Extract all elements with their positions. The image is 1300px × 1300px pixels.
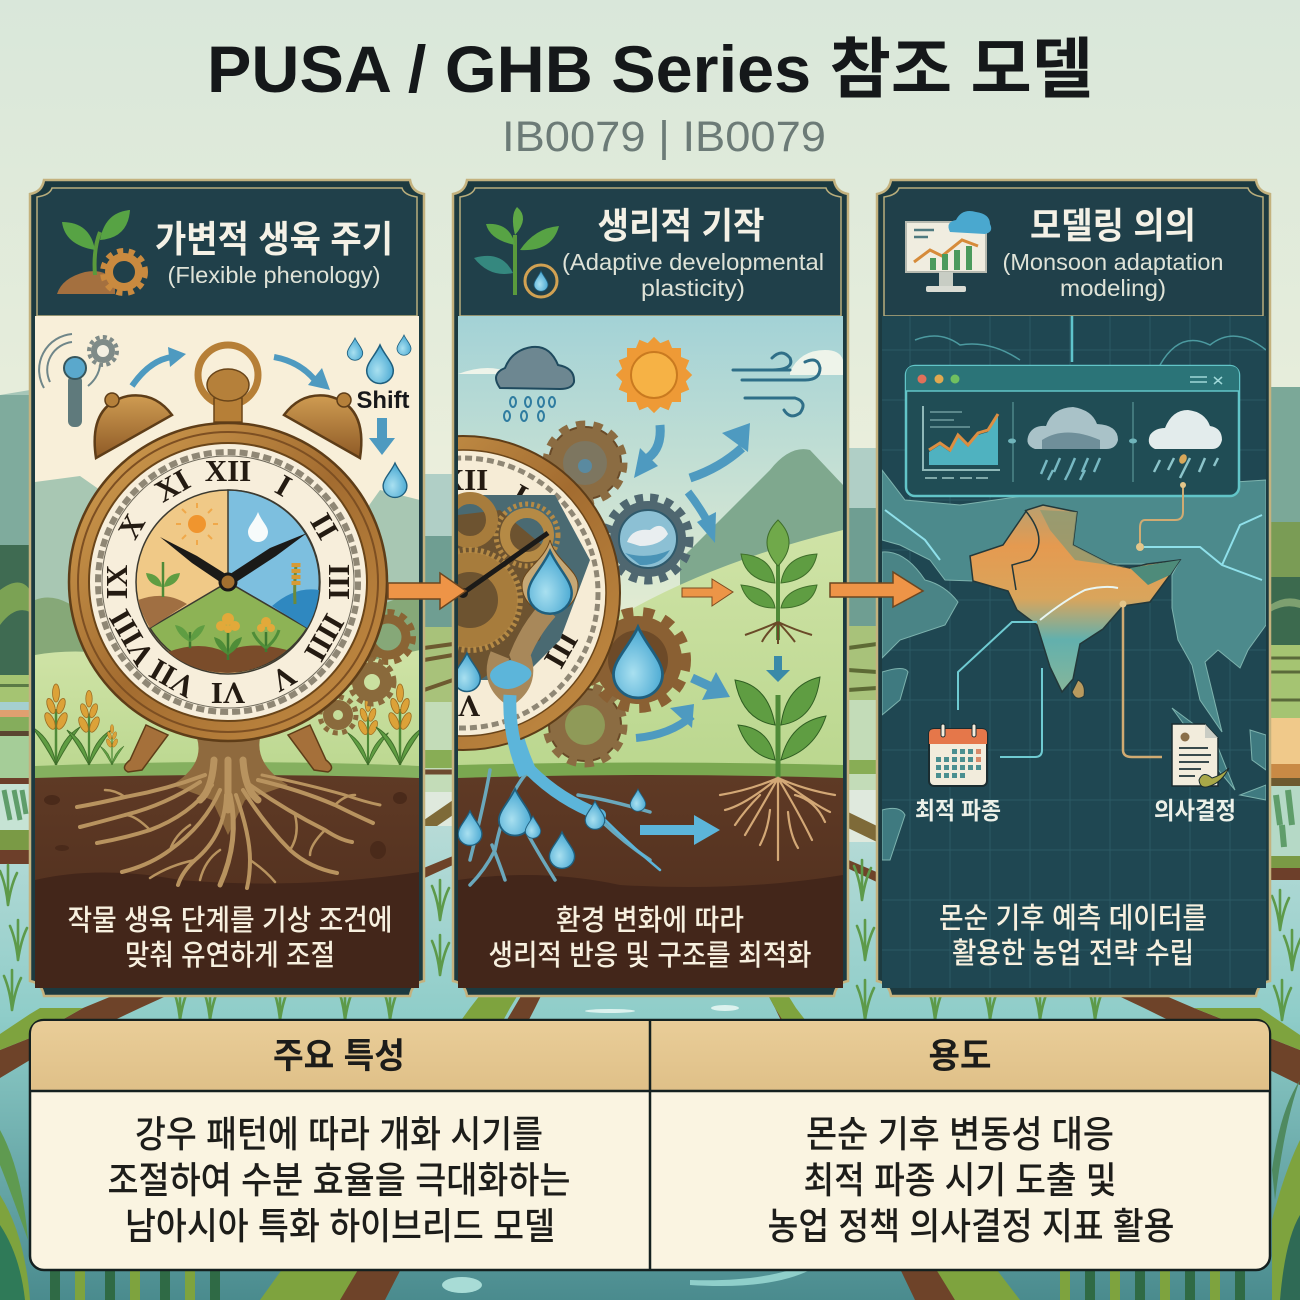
clock cutaway: III xyxy=(537,625,586,674)
panel 3 subheading xyxy=(1002,249,1224,301)
subtitle: IB0079 | IB0079 xyxy=(502,113,826,161)
rain cloud 2 xyxy=(1149,410,1222,478)
title: PUSA / GHB Series 참조 모델 xyxy=(207,32,1093,106)
panel frame xyxy=(30,180,424,996)
background water xyxy=(0,826,1300,1300)
panel 1 subheading: (Flexible phenology) xyxy=(168,262,380,288)
column: uses: 농업 정책 의사결정 지표 활용 xyxy=(768,1206,1174,1247)
clock numerals xyxy=(107,461,349,703)
background hills and terraces xyxy=(0,522,1300,880)
clock numerals: VI xyxy=(211,676,245,711)
panel 1 caption: 작물 생육 단계를 기상 조건에 xyxy=(68,904,392,937)
icon: upper plant xyxy=(741,520,817,644)
panel 2 header xyxy=(460,188,841,316)
background far mountains xyxy=(0,387,1300,627)
icon: alarm clock xyxy=(69,345,387,741)
arrows xyxy=(634,423,790,845)
column: key characteristics: 조절하여 수분 효율을 극대화하는 xyxy=(108,1160,570,1201)
mini area chart xyxy=(923,406,1000,478)
clock numerals: VII xyxy=(143,652,201,705)
panel frame xyxy=(877,180,1270,996)
panel 2 subheading: (Adaptive developmental xyxy=(562,249,824,275)
grid xyxy=(882,316,1266,988)
icon: document with check xyxy=(1172,724,1229,787)
clock legs and root trunk xyxy=(124,725,332,835)
table header row xyxy=(31,1021,1269,1091)
soil droplets xyxy=(458,789,646,868)
icon: raindrops xyxy=(347,335,411,497)
panel 3 heading: 모델링 의의 xyxy=(1030,205,1196,246)
column: uses: 최적 파종 시기 도출 및 xyxy=(804,1160,1116,1201)
clock numerals: X xyxy=(111,507,152,545)
clock numerals: V xyxy=(265,658,302,700)
panel 1 header xyxy=(37,188,417,316)
roots xyxy=(77,760,380,888)
roots and water channel xyxy=(468,738,662,887)
clock numerals: XII xyxy=(205,453,251,488)
icon: sprout with gear xyxy=(57,210,145,294)
panel 3 subheading: modeling) xyxy=(1060,275,1166,301)
arrow: blue curve to drops xyxy=(274,357,330,390)
panel 2 subheading xyxy=(562,249,824,301)
panel 2 caption: 환경 변화에 따라 xyxy=(556,904,744,937)
panel 1 heading: 가변적 생육 주기 xyxy=(155,219,393,260)
paddy banks xyxy=(0,775,1300,1300)
panel 3 caption: 활용한 농업 전략 수립 xyxy=(952,937,1194,970)
gears behind clock xyxy=(320,612,413,733)
arrow: panel 2 to panel 3 xyxy=(830,572,923,607)
clock numerals: IIII xyxy=(297,608,352,667)
icon: sun xyxy=(616,337,692,413)
clock numerals: XI xyxy=(149,462,196,509)
mountain xyxy=(680,449,843,600)
icon: monitor with cloud xyxy=(906,211,991,292)
foreground reeds xyxy=(55,1270,1240,1300)
panel 3 caption xyxy=(939,902,1207,970)
panel: flexible phenology xyxy=(30,180,424,996)
panel 2 caption xyxy=(488,904,812,972)
rain cloud 1 xyxy=(1027,407,1118,480)
column: key characteristics: 주요 특성 xyxy=(273,1037,405,1076)
column: key characteristics: 남아시아 특화 하이브리드 모델 xyxy=(125,1206,555,1247)
clock numerals: VIII xyxy=(102,604,161,672)
foreground leaves at the edges xyxy=(0,1080,1300,1300)
panel: physiological mechanism xyxy=(452,178,850,998)
column: uses: 용도 xyxy=(928,1037,992,1076)
clock cutaway: I xyxy=(506,477,534,513)
clock cutaway: VI xyxy=(446,689,480,724)
clock cutaway: XII xyxy=(442,462,488,497)
panel 2 subheading: plasticity) xyxy=(641,275,745,301)
column: uses: 몬순 기후 변동성 대응 xyxy=(806,1114,1114,1155)
icon: wind xyxy=(733,353,820,416)
panel 3 illustration xyxy=(882,316,1266,988)
clock numerals: I xyxy=(270,467,298,504)
panel 1 caption xyxy=(68,904,392,972)
column: key characteristics: 강우 패턴에 따라 개화 시기를 xyxy=(135,1114,543,1155)
panel 1 caption: 맞춰 유연하게 조절 xyxy=(125,939,335,972)
icon: rain cloud xyxy=(496,347,574,421)
map: India xyxy=(970,505,1180,692)
panel 2 illustration xyxy=(458,316,843,988)
clock numerals: IX xyxy=(99,564,134,599)
map: surrounding land xyxy=(882,470,1266,860)
clock numerals: III xyxy=(322,564,357,600)
label: optimal sowing: 최적 파종 xyxy=(915,798,1001,825)
connector lines xyxy=(958,482,1186,757)
arrow: blue curve to clock xyxy=(132,347,186,386)
clock hands xyxy=(160,533,307,590)
label: decision making: 의사결정 xyxy=(1154,798,1236,825)
panel 3 caption: 몬순 기후 예측 데이터를 xyxy=(939,902,1207,935)
seasonal dial xyxy=(136,490,320,674)
panel: modeling significance xyxy=(877,180,1270,996)
panel 3 header xyxy=(884,188,1263,316)
icon: sensor xyxy=(39,334,117,427)
dashboard window xyxy=(906,366,1239,496)
rice plants xyxy=(0,860,1300,1020)
panel frame xyxy=(453,180,848,996)
icon: lower plant with roots xyxy=(720,677,835,860)
arrow: shift down xyxy=(369,418,395,455)
panel 1 illustration xyxy=(32,316,424,988)
clock cutaway xyxy=(458,435,621,751)
summary table xyxy=(30,1020,1270,1270)
panel 3 subheading: (Monsoon adaptation xyxy=(1002,249,1224,275)
clock numerals: II xyxy=(303,507,346,545)
column: uses xyxy=(768,1037,1174,1247)
label: Shift: Shift xyxy=(356,387,410,414)
icon: plant with drop xyxy=(474,207,559,297)
panel 2 heading: 생리적 기작 xyxy=(598,205,764,246)
arrow: orange to plant xyxy=(682,579,733,606)
wheat plants xyxy=(32,684,424,765)
panel 2 caption: 생리적 반응 및 구조를 최적화 xyxy=(488,939,812,972)
column: key characteristics xyxy=(108,1037,570,1247)
gears xyxy=(547,425,689,763)
icon: calendar xyxy=(929,724,987,786)
arrow: panel 1 to panel 2 xyxy=(388,573,466,609)
